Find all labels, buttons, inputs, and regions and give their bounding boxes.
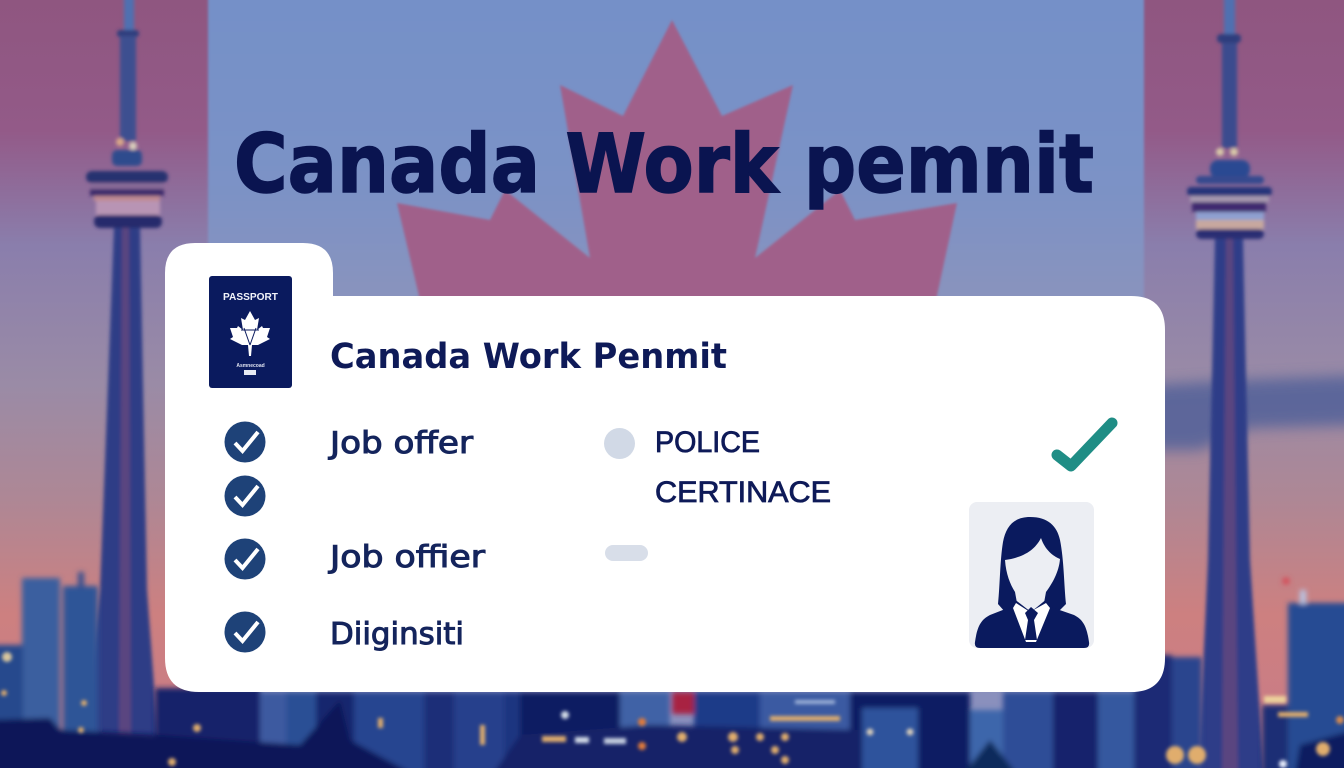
- left CN Tower: [84, 0, 168, 740]
- text: diiginsiti: Diiginsiti: [330, 617, 464, 652]
- text: job offier: Job offier: [328, 540, 486, 575]
- background: blurred maple leaf: [397, 20, 957, 300]
- city window lights: [1, 652, 1344, 768]
- text: job offer: Job offer: [328, 426, 474, 461]
- background: distant cloud: [1150, 375, 1344, 450]
- city skyline: [0, 572, 1344, 768]
- icon: check badge 2: [224, 476, 266, 516]
- text: certinace: CERTINACE: [655, 476, 831, 509]
- icon: check badge 4: [224, 612, 266, 652]
- background: Canadian flag centre panel: [208, 0, 1144, 768]
- text: police: POLICE: [655, 426, 760, 459]
- main title: Canada Work pemnit: [234, 118, 1094, 212]
- icon: check badge 3: [224, 538, 266, 580]
- card heading: Canada Work Penmit: [330, 337, 727, 377]
- white permit card with folder tab: [165, 243, 1165, 692]
- icon: grey status pill: [605, 545, 648, 561]
- icon: passport: [209, 276, 292, 388]
- icon: passport: PASSPORT: [223, 291, 279, 303]
- icon: applicant portrait: [969, 502, 1094, 648]
- icon: passport: Asmnecoad: [236, 363, 265, 369]
- icon: check badge 1: [224, 422, 266, 462]
- icon: teal check mark: [1057, 423, 1112, 466]
- right CN Tower: [1187, 0, 1272, 768]
- icon: grey status dot: [604, 428, 635, 459]
